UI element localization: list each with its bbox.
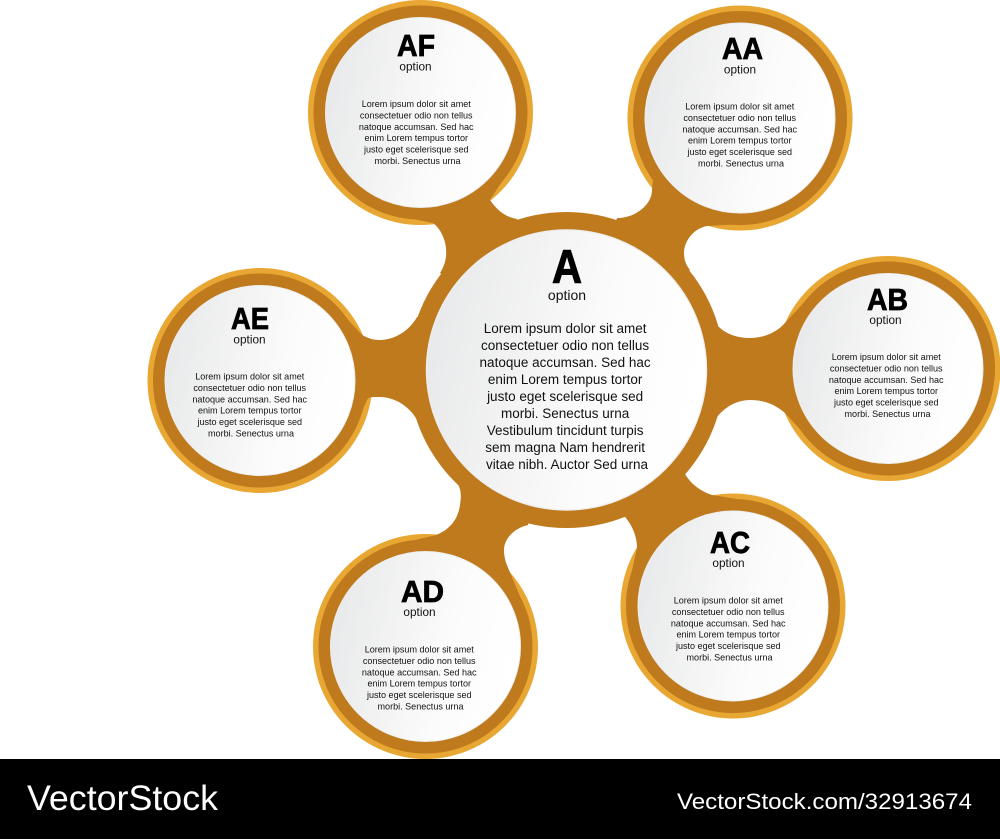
- connector arms linking the centre hub to the satellites: [260, 112, 888, 646]
- text block: AA description: consectetuer odio non tellus: [683, 113, 797, 123]
- text block: AA description: morbi. Senectus urna: [698, 158, 785, 168]
- text block: AE description: justo eget scelerisque sed: [196, 417, 302, 427]
- panel: satellite AA: [633, 11, 847, 225]
- text block: AC description: natoque accumsan. Sed hac: [671, 618, 786, 628]
- text block: AA description: Lorem ipsum dolor sit amet: [685, 102, 795, 112]
- text block: AC description: justo eget scelerisque sed: [675, 641, 781, 651]
- text block: AE description: consectetuer odio non tellus: [193, 383, 307, 393]
- text block: AB description: Lorem ipsum dolor sit amet: [832, 352, 941, 362]
- text block: AF description: justo eget scelerisque sed: [363, 145, 469, 155]
- text block: AD description: natoque accumsan. Sed hac: [362, 667, 477, 677]
- text block: AF description: consectetuer odio non tellus: [360, 110, 473, 120]
- text block: AC description: consectetuer odio non tellus: [672, 607, 785, 617]
- text block: centre description: sem magna Nam hendrerit: [485, 440, 645, 455]
- label: option: option: [548, 287, 586, 303]
- panel: centre hub A: [408, 212, 724, 528]
- panel: satellite AB: [781, 262, 995, 476]
- text block: centre description: vitae nibh. Auctor Sed urna: [486, 457, 649, 472]
- text block: centre description: Lorem ipsum dolor sit amet: [484, 321, 647, 336]
- panel: satellite AD: [318, 540, 532, 754]
- text block: AE description: morbi. Senectus urna: [208, 428, 295, 438]
- text block: AE description: Lorem ipsum dolor sit amet: [195, 372, 305, 382]
- text block: centre description: justo eget scelerisque sed: [486, 389, 643, 404]
- text block: AF description: natoque accumsan. Sed hac: [359, 122, 474, 132]
- heading: AB: AB: [867, 282, 908, 317]
- text block: centre description: consectetuer odio non tellus: [481, 338, 649, 353]
- text block: AE description: enim Lorem tempus tortor: [198, 406, 302, 416]
- text block: centre description: enim Lorem tempus tortor: [488, 372, 643, 387]
- text block: AA description: justo eget scelerisque sed: [686, 147, 792, 157]
- label: option AD: option: [403, 605, 436, 619]
- text block: AC description: enim Lorem tempus tortor: [676, 630, 780, 640]
- text block: AD description: morbi. Senectus urna: [378, 702, 464, 712]
- text block: AD description: consectetuer odio non tellus: [363, 656, 476, 666]
- text block: AF description: morbi. Senectus urna: [374, 156, 461, 166]
- heading: AA: AA: [722, 31, 763, 66]
- text block: AA description: enim Lorem tempus tortor: [688, 136, 792, 146]
- text block: AD description: justo eget scelerisque sed: [366, 690, 472, 700]
- footer image id: VectorStock.com/32913674: [677, 789, 972, 814]
- text block: AB description: justo eget scelerisque sed: [833, 398, 939, 408]
- panel: satellite AF: [314, 6, 528, 220]
- label: option AF: option: [399, 60, 432, 74]
- heading: A: A: [552, 240, 582, 293]
- text block: AD description: enim Lorem tempus tortor: [367, 679, 471, 689]
- text block: AB description: natoque accumsan. Sed hac: [829, 375, 944, 385]
- label: option AA: option: [724, 62, 756, 76]
- text block: AC description: Lorem ipsum dolor sit amet: [674, 596, 783, 606]
- orange outer rims of the satellite circles: [148, 0, 1000, 759]
- text block: centre description: Vestibulum tincidunt turpis: [487, 423, 644, 438]
- text block: AB description: enim Lorem tempus tortor: [834, 386, 938, 396]
- panel: satellite AC: [626, 499, 840, 713]
- footer logo text: VectorStock: [27, 779, 219, 818]
- text block: AC description: morbi. Senectus urna: [686, 652, 773, 662]
- text block: AD description: Lorem ipsum dolor sit amet: [365, 644, 474, 654]
- label: option AB: option: [869, 313, 902, 327]
- label: option AC: option: [712, 556, 745, 570]
- label: option AE: option: [233, 332, 266, 346]
- heading: AF: AF: [397, 28, 435, 63]
- text block: AB description: consectetuer odio non tellus: [830, 363, 943, 373]
- footer bar: [0, 759, 1000, 839]
- heading: AE: AE: [231, 301, 269, 336]
- text block: AE description: natoque accumsan. Sed hac: [192, 394, 308, 404]
- text block: AF description: Lorem ipsum dolor sit amet: [362, 99, 471, 109]
- text block: centre description: natoque accumsan. Sed hac: [480, 355, 651, 370]
- text block: centre description: morbi. Senectus urna: [501, 406, 630, 421]
- text block: AB description: morbi. Senectus urna: [844, 409, 931, 419]
- heading: AD: AD: [401, 574, 444, 609]
- heading: AC: AC: [710, 525, 750, 560]
- panel: satellite AE: [153, 274, 367, 488]
- text block: AA description: natoque accumsan. Sed hac: [682, 124, 798, 134]
- text block: AF description: enim Lorem tempus tortor: [364, 133, 468, 143]
